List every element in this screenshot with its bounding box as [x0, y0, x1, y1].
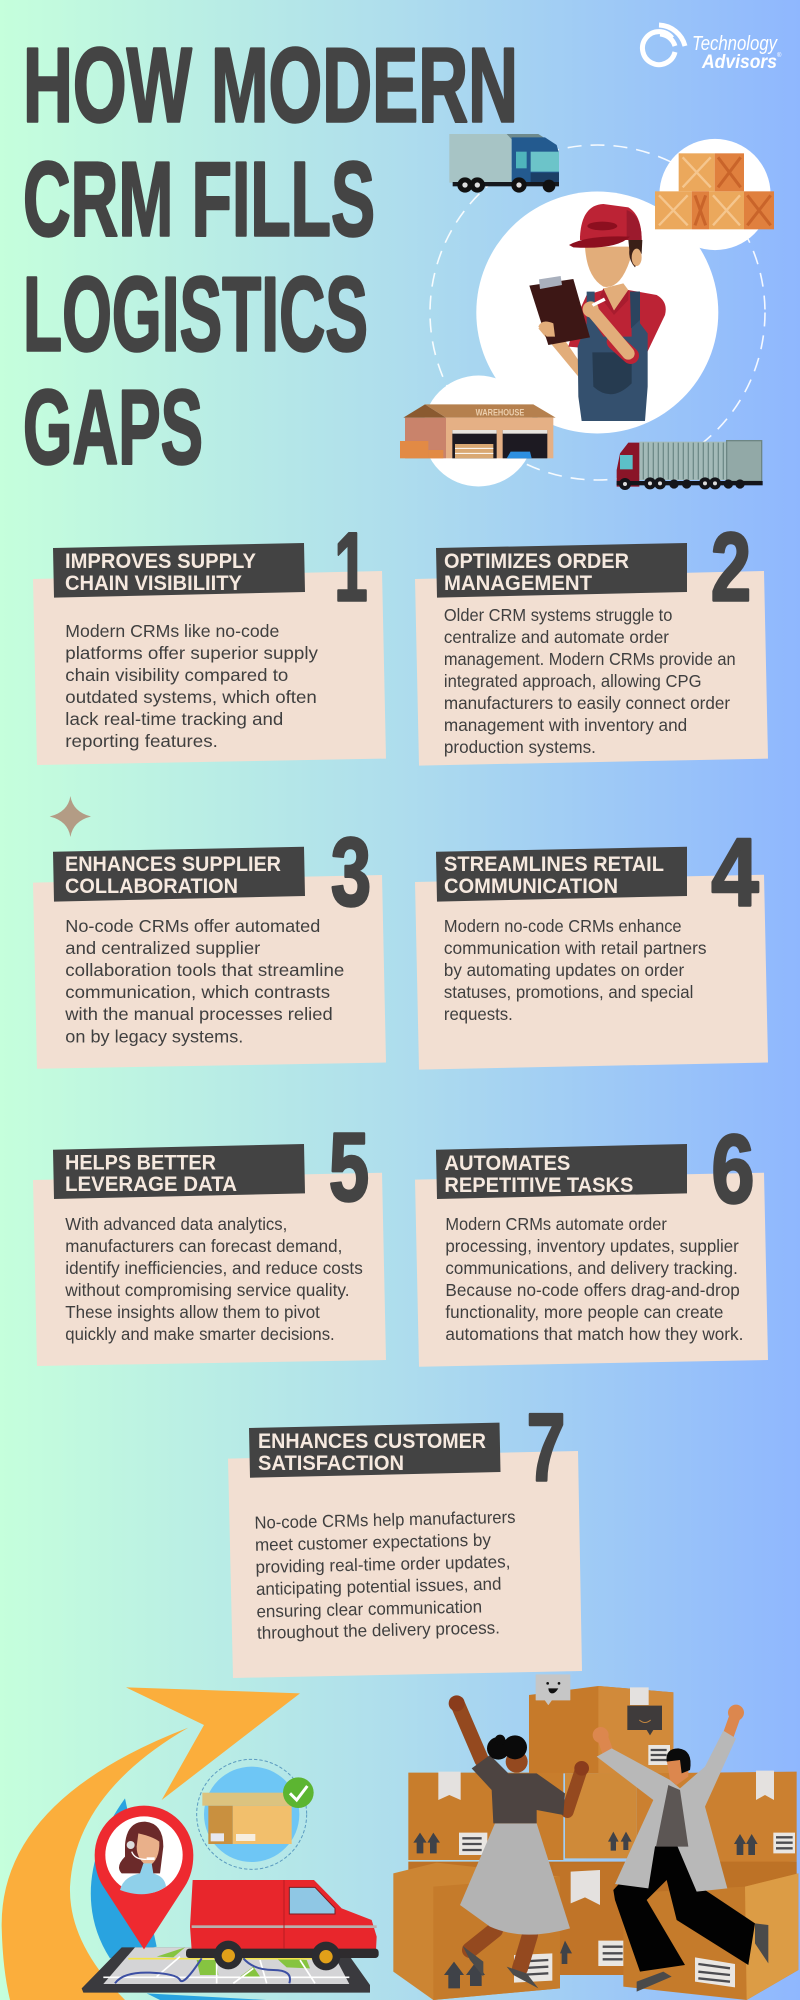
icon: worker with clipboard	[529, 204, 666, 421]
body text: quickly and make smarter decisions.	[65, 1324, 335, 1344]
heading	[444, 550, 629, 595]
body text: communications, and delivery tracking.	[445, 1258, 738, 1278]
panel: optimizes order management	[415, 513, 768, 766]
illustration: logistics worker hub	[400, 134, 774, 490]
heading	[444, 1152, 633, 1197]
body text: meet customer expectations by	[255, 1530, 491, 1555]
logo: Technology Advisors: Technology	[692, 33, 778, 55]
heading bar	[53, 847, 305, 902]
number 1: 1	[334, 514, 368, 622]
heading	[444, 853, 664, 898]
body text: providing real-time order updates,	[255, 1551, 511, 1577]
number 7: 7	[527, 1392, 565, 1501]
illustration: celebrating people and boxes	[393, 1675, 798, 2000]
heading	[65, 550, 256, 595]
body text: platforms offer superior supply	[65, 643, 318, 663]
heading: COMMUNICATION	[444, 875, 618, 898]
heading: IMPROVES SUPPLY	[65, 550, 256, 573]
logo: Technology Advisors	[642, 25, 782, 73]
heading	[65, 853, 281, 898]
body text: communication with retail partners	[444, 938, 707, 958]
number 4: 4	[711, 818, 759, 927]
body text: production systems.	[444, 737, 596, 757]
body text: collaboration tools that streamline	[65, 960, 344, 980]
logo: Technology Advisors: Advisors	[701, 52, 777, 73]
person: woman cheering	[449, 1695, 589, 1988]
speech bubbles	[536, 1675, 662, 1735]
heading: COLLABORATION	[65, 875, 238, 898]
body text: functionality, more people can create	[445, 1302, 723, 1322]
title: CRM FILLS	[23, 140, 375, 258]
dashed route circle	[430, 145, 765, 480]
heading: LEVERAGE DATA	[65, 1173, 237, 1196]
body text: reporting features.	[65, 731, 218, 751]
title: LOGISTICS	[23, 256, 368, 374]
panel: enhances supplier collaboration	[33, 818, 386, 1069]
body text	[254, 1507, 516, 1643]
body text: outdated systems, which often	[65, 687, 317, 707]
heading bar	[436, 1144, 687, 1199]
body text: by automating updates on order	[444, 960, 684, 980]
heading: OPTIMIZES ORDER	[444, 550, 629, 573]
panel: automates repetitive tasks	[415, 1114, 768, 1367]
body text: communication, which contrasts	[65, 982, 330, 1002]
body text: lack real-time tracking and	[65, 709, 283, 729]
map on phone	[82, 1947, 370, 1993]
heading: CHAIN VISIBILIITY	[65, 572, 242, 595]
icon: red van	[186, 1880, 379, 1970]
heading bar	[53, 543, 305, 598]
arrow: orange swoosh	[2, 1687, 300, 2000]
heading: SATISFACTION	[258, 1452, 404, 1475]
body text: identify inefficiencies, and reduce costs	[65, 1258, 363, 1278]
heading: MANAGEMENT	[444, 572, 592, 595]
body text: statuses, promotions, and special	[444, 982, 693, 1002]
icon: location pin with agent	[95, 1806, 193, 1949]
body text: ensuring clear communication	[256, 1596, 482, 1621]
body text: automations that match how they work.	[445, 1324, 743, 1344]
body text	[444, 916, 707, 1024]
number 5: 5	[329, 1113, 369, 1222]
body text: centralize and automate order	[444, 627, 669, 647]
body text: Modern no-code CRMs enhance	[444, 916, 682, 936]
body text: Older CRM systems struggle to	[444, 605, 672, 625]
body text: No-code CRMs help manufacturers	[254, 1507, 516, 1533]
number 3: 3	[331, 818, 371, 927]
body text: manufacturers to easily connect order	[444, 693, 730, 713]
heading: STREAMLINES RETAIL	[444, 853, 664, 876]
white circles	[423, 139, 771, 486]
body text: integrated approach, allowing CPG	[444, 671, 702, 691]
icon: container truck	[617, 441, 763, 490]
icon: warehouse: WAREHOUSE	[476, 408, 524, 418]
icon: sparkle star	[50, 796, 91, 837]
body text: Because no-code offers drag-and-drop	[445, 1280, 740, 1300]
body text: with the manual processes relied	[64, 1004, 333, 1024]
heading: AUTOMATES	[444, 1152, 570, 1175]
title	[23, 26, 518, 486]
body text: management with inventory and	[444, 715, 687, 735]
body text: With advanced data analytics,	[65, 1214, 287, 1234]
body text	[64, 916, 344, 1046]
body text: chain visibility compared to	[65, 665, 288, 685]
body text: No-code CRMs offer automated	[65, 916, 320, 936]
person: man cheering	[593, 1705, 768, 1992]
body text: manufacturers can forecast demand,	[65, 1236, 342, 1256]
body text: processing, inventory updates, supplier	[445, 1236, 739, 1256]
heading: ENHANCES CUSTOMER	[258, 1430, 486, 1453]
title: GAPS	[23, 368, 203, 486]
body text: without compromising service quality.	[64, 1280, 350, 1300]
heading: REPETITIVE TASKS	[444, 1174, 633, 1197]
panel: enhances customer satisfaction	[228, 1392, 582, 1678]
heading	[65, 1151, 237, 1196]
body text: and centralized supplier	[65, 938, 260, 958]
heading bar	[436, 543, 687, 598]
body text: throughout the delivery process.	[257, 1617, 500, 1643]
heading bar	[53, 1144, 305, 1199]
body text: Modern CRMs automate order	[445, 1214, 667, 1234]
number 6: 6	[711, 1114, 755, 1223]
body text: Modern CRMs like no-code	[65, 621, 279, 641]
title: HOW MODERN	[23, 26, 518, 144]
body text: anticipating potential issues, and	[256, 1574, 502, 1599]
panel: helps better leverage data	[33, 1113, 386, 1366]
panel: improves supply chain visibility	[33, 514, 386, 765]
panel: streamlines retail communication	[415, 818, 768, 1070]
icon: stacked wooden crates	[655, 153, 774, 229]
number 2: 2	[711, 513, 751, 622]
body text: management. Modern CRMs provide an	[444, 649, 736, 669]
heading: HELPS BETTER	[65, 1151, 216, 1174]
cardboard boxes	[393, 1686, 798, 2000]
blue swoosh	[91, 1798, 267, 2000]
heading	[258, 1430, 486, 1475]
body text: requests.	[444, 1004, 513, 1024]
body text: These insights allow them to pivot	[65, 1302, 320, 1322]
body text	[65, 621, 318, 751]
icon: blue delivery truck	[449, 134, 559, 193]
illustration: delivery van and map	[2, 1687, 379, 2000]
heading bar	[436, 847, 687, 902]
logo: Technology Advisors: ®	[777, 52, 782, 59]
icon: warehouse	[400, 404, 556, 458]
body text: on by legacy systems.	[65, 1026, 243, 1046]
body text	[64, 1214, 363, 1344]
heading bar	[249, 1423, 500, 1478]
body text	[445, 1214, 743, 1344]
body text	[444, 605, 736, 757]
icon: parcel with check	[197, 1759, 314, 1869]
heading: ENHANCES SUPPLIER	[65, 853, 281, 876]
